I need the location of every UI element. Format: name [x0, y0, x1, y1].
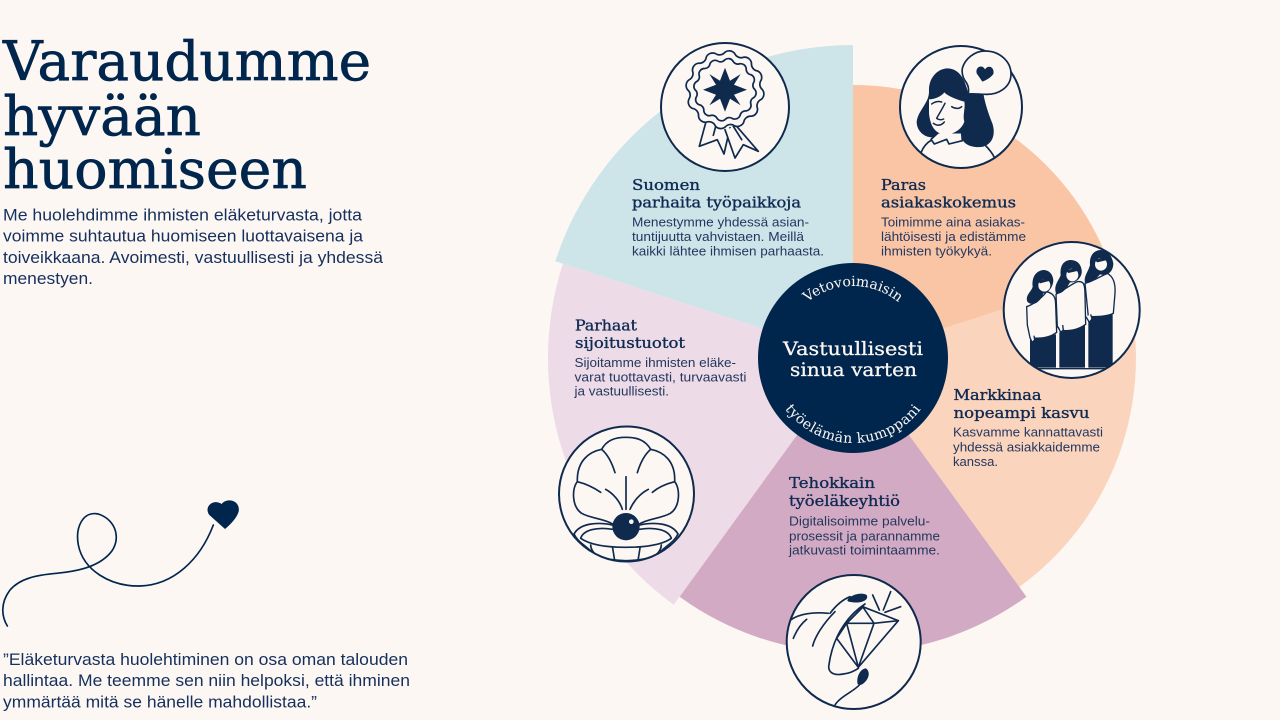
- quote: [3, 650, 410, 712]
- center circle: työelämän kumppani: [786, 404, 921, 443]
- title: hyvään: [3, 85, 201, 148]
- decorative heart line: [3, 500, 239, 626]
- icon: rosette: [661, 43, 789, 171]
- text: Parhaat sijoitustuotot: varat tuottavasti, turvaavasti: [574, 369, 747, 384]
- icon: hand holding diamond: [787, 575, 921, 709]
- intro text: Me huolehdimme ihmisten eläketurvasta, jotta: [3, 206, 363, 225]
- text: Markkinaa nopeampi kasvu: nopeampi kasvu: [954, 406, 1090, 422]
- intro text: voimme suhtautua huomiseen luottavaisena ja: [3, 227, 364, 246]
- icon: three women: [1004, 242, 1140, 378]
- text: Suomen parhaita työpaikkoja: Menestymme yhdessä asian-: [632, 215, 809, 230]
- text: Tehokkain työeläkeyhtiö: prosessit ja parannamme: [789, 528, 940, 544]
- text: Parhaat sijoitustuotot: ja vastuullisesti.: [573, 384, 669, 399]
- title: [2, 30, 371, 201]
- text: Suomen parhaita työpaikkoja: tuntijuutta vahvistaen. Meillä: [632, 229, 805, 244]
- text: Paras asiakaskokemus: Toimimme aina asiakas-: [881, 215, 1025, 230]
- center circle: [758, 263, 948, 453]
- center circle: sinua varten: [790, 360, 917, 381]
- text: Paras asiakaskokemus: ihmisten työkykyä.: [881, 243, 992, 258]
- icon: pearl shell: [559, 426, 694, 562]
- center circle: Vetovoimaisin: [801, 276, 901, 302]
- text: Tehokkain työeläkeyhtiö: jatkuvasti toimintaamme.: [788, 542, 940, 558]
- title: huomiseen: [3, 138, 307, 201]
- text: Paras asiakaskokemus: [881, 178, 1026, 258]
- icon: woman with heart bubble: [900, 46, 1022, 168]
- text: Tehokkain työeläkeyhtiö: [788, 476, 940, 558]
- text: Suomen parhaita työpaikkoja: Suomen: [632, 178, 700, 194]
- text: Paras asiakaskokemus: asiakaskokemus: [881, 196, 1016, 212]
- text: Suomen parhaita työpaikkoja: [632, 178, 824, 258]
- text: Parhaat sijoitustuotot: sijoitustuotot: [575, 336, 685, 352]
- text: Parhaat sijoitustuotot: Sijoitamme ihmisten eläke-: [574, 355, 736, 370]
- text: Suomen parhaita työpaikkoja: parhaita työpaikkoja: [632, 196, 801, 212]
- segment: Paras asiakaskokemus: [853, 85, 1113, 358]
- text: Markkinaa nopeampi kasvu: Kasvamme kannattavasti: [953, 425, 1103, 440]
- center circle: Vastuullisesti: [782, 339, 923, 360]
- quote: ”Eläketurvasta huolehtiminen on osa oman talouden: [3, 650, 408, 669]
- text: Markkinaa nopeampi kasvu: yhdessä asiakkaidemme: [953, 440, 1100, 455]
- quote: ymmärtää mitä se hänelle mahdollistaa.”: [3, 693, 317, 712]
- segment: Suomen parhaita työpaikkoja: [555, 45, 853, 358]
- title: Varaudumme: [2, 30, 371, 93]
- segment: Markkinaa nopeampi kasvu: [853, 270, 1136, 587]
- intro text: menestyen.: [3, 269, 93, 288]
- intro text: toiveikkaana. Avoimesti, vastuullisesti ja yhdessä: [3, 248, 384, 267]
- text: Tehokkain työeläkeyhtiö: Tehokkain: [789, 476, 875, 492]
- text: Paras asiakaskokemus: Paras: [881, 178, 926, 194]
- segment: Tehokkain työeläkeyhtiö: [680, 358, 1026, 653]
- text: Markkinaa nopeampi kasvu: [953, 388, 1103, 469]
- text: Tehokkain työeläkeyhtiö: työeläkeyhtiö: [789, 494, 900, 510]
- wheel diagram: [548, 42, 1141, 710]
- text: Suomen parhaita työpaikkoja: kaikki lähtee ihmisen parhaasta.: [632, 243, 824, 258]
- intro text: [3, 206, 384, 288]
- text: Markkinaa nopeampi kasvu: Markkinaa: [954, 388, 1042, 404]
- text: Parhaat sijoitustuotot: [573, 319, 747, 399]
- text: Paras asiakaskokemus: lähtöisesti ja edistämme: [881, 229, 1026, 244]
- quote: hallintaa. Me teemme sen niin helpoksi, että ihminen: [3, 671, 410, 690]
- text: Markkinaa nopeampi kasvu: kanssa.: [953, 454, 998, 469]
- text: Parhaat sijoitustuotot: Parhaat: [575, 319, 637, 335]
- text: Tehokkain työeläkeyhtiö: Digitalisoimme palvelu-: [789, 514, 930, 529]
- segment: Parhaat sijoitustuotot: [548, 264, 853, 605]
